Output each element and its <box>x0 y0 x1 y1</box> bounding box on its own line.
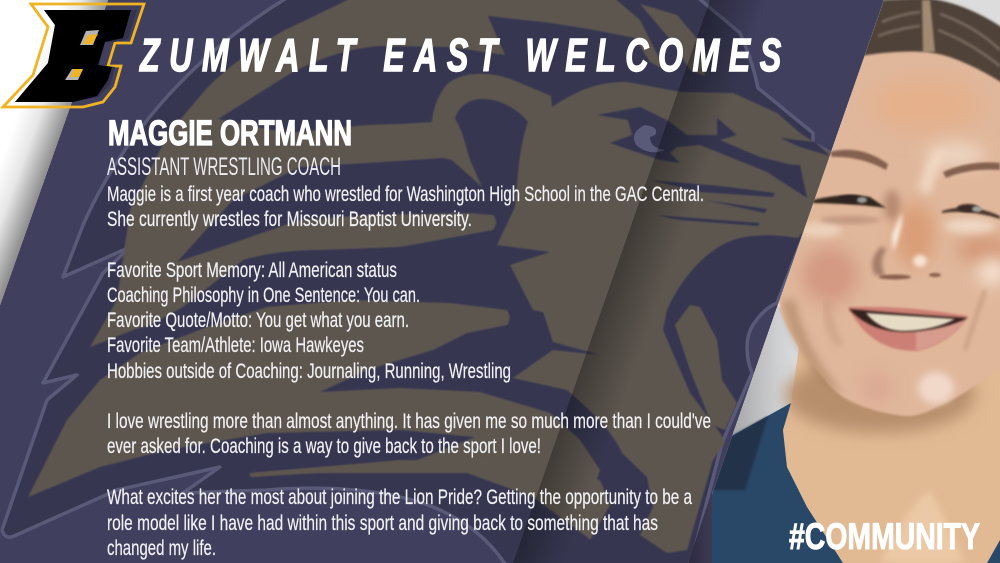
text block: favorites: Favorite Quote/Motto: You get what you earn. <box>107 309 409 332</box>
lion tan lower mane <box>28 300 600 500</box>
mouth <box>848 307 968 351</box>
neck <box>783 340 1000 563</box>
text block: favorites <box>107 259 511 383</box>
title: ZUMWALT EAST WELCOMES <box>139 30 782 81</box>
text block: favorites: Favorite Sport Memory: All American status <box>107 259 397 282</box>
shirt <box>712 403 1000 563</box>
lion iris <box>634 125 665 152</box>
lion tan tongue <box>675 305 737 430</box>
text block: biography <box>107 183 704 231</box>
logo notches <box>80 30 99 45</box>
role subheading: ASSISTANT WRESTLING COACH <box>107 153 341 181</box>
text block: joining the Lion Pride: role model like I have had within this sport and giving back to something that has <box>107 512 658 535</box>
text block: favorites: Favorite Team/Athlete: Iowa Hawkeyes <box>107 334 364 357</box>
text block: personal statement <box>107 410 711 458</box>
nose <box>872 212 941 280</box>
name heading: MAGGIE ORTMANN <box>108 114 352 153</box>
text block: personal statement: I love wrestling more than almost anything. It has given me so much more than I could've <box>107 410 711 433</box>
text block: joining the Lion Pride: What excites her the most about joining the Lion Pride? Getting the opportunity to be a <box>107 486 692 509</box>
face <box>778 52 1000 416</box>
face shading <box>782 80 1000 404</box>
text block: biography: She currently wrestles for Missouri Baptist University. <box>107 208 472 231</box>
eyes <box>813 195 1000 219</box>
lion tan head and mane <box>90 0 835 553</box>
hair <box>849 0 1000 100</box>
photo background <box>866 0 1000 51</box>
logo: gold and black E <box>3 4 144 107</box>
text block: personal statement: ever asked for. Coaching is a way to give back to the sport I love! <box>107 435 541 458</box>
grey wedge behind shoulder <box>732 305 799 436</box>
text block: joining the Lion Pride <box>107 486 692 560</box>
text block: biography: Maggie is a first year coach who wrestled for Washington High School in the GAC Central. <box>107 183 704 206</box>
lion tan right top stripe <box>640 4 705 76</box>
text block: favorites: Hobbies outside of Coaching: Journaling, Running, Wrestling <box>107 360 511 383</box>
panel edge band beside shirt <box>688 437 730 563</box>
eyebrows <box>830 150 1000 178</box>
text block: favorites: Coaching Philosophy in One Sentence: You can. <box>107 284 420 307</box>
lion eye and muzzle lines <box>597 107 830 226</box>
photo: portrait <box>712 0 1000 563</box>
fold shading <box>513 0 752 563</box>
text block: joining the Lion Pride: changed my life. <box>107 537 216 560</box>
